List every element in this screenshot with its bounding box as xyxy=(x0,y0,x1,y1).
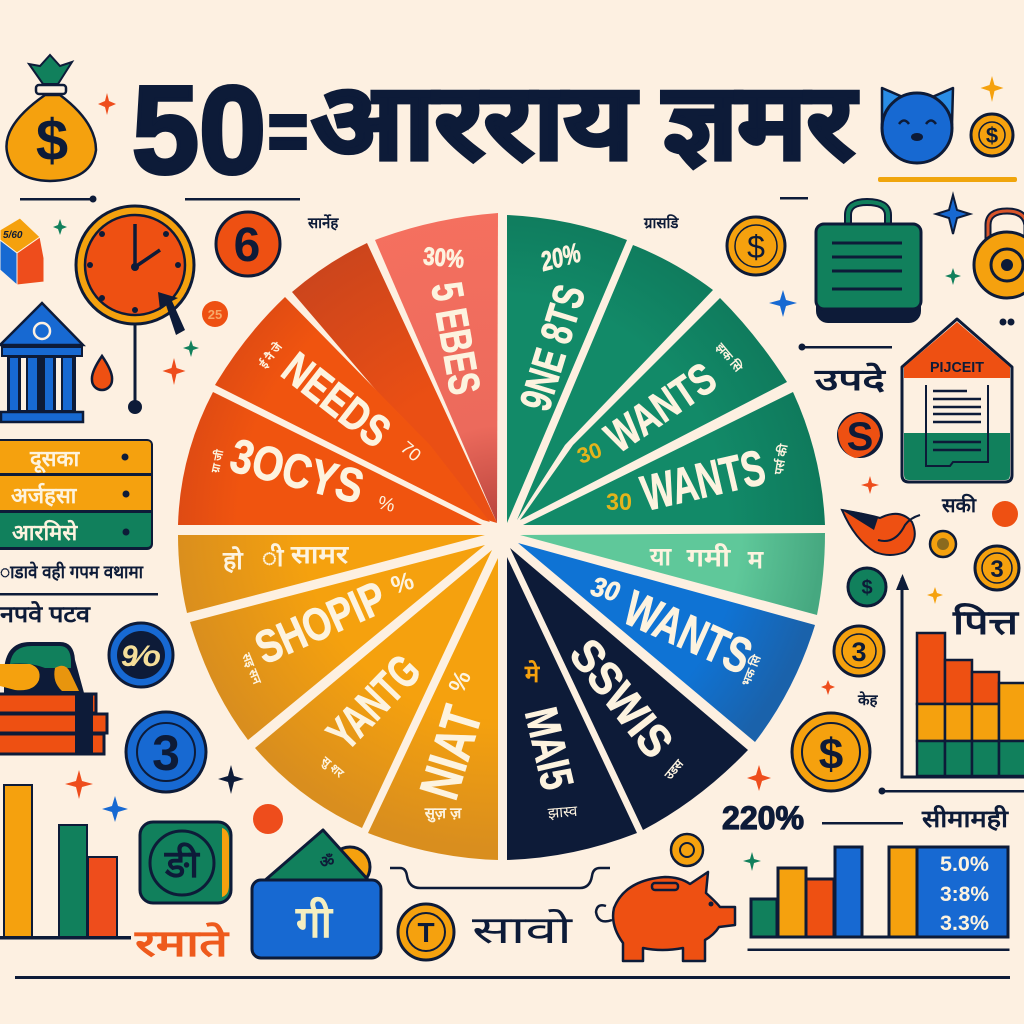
segment: light green: गमी xyxy=(686,543,732,572)
icon: small coin above pig xyxy=(671,834,703,866)
panel: percentages: 3:8% xyxy=(940,883,989,906)
icon: coin top right: $ xyxy=(986,123,998,148)
bar chart right xyxy=(896,574,1024,777)
icon: coins right cluster: 3 xyxy=(851,637,867,667)
segment: NEEDS xyxy=(215,297,490,522)
label bars left: आरमिसे xyxy=(12,519,78,545)
text: bottom word: सावो xyxy=(472,908,574,952)
icon: briefcase xyxy=(816,202,921,323)
icon: document house xyxy=(902,319,1012,482)
divider top left xyxy=(20,196,300,202)
segment: green WANTS 2 xyxy=(523,392,825,525)
icon: sparkles left xyxy=(53,219,199,385)
heading left: नपवे पटव xyxy=(0,600,91,627)
icon: percent circle: 9⁄o xyxy=(121,640,161,673)
panel: percentages: 5.0% xyxy=(940,853,989,876)
icon: wallet xyxy=(252,830,381,958)
text: small headings above wheel xyxy=(307,214,679,232)
text: orange word: रमाते xyxy=(134,922,231,964)
icon: green seal xyxy=(140,822,231,903)
title xyxy=(132,62,858,200)
segment: MAI5: मे xyxy=(524,660,541,688)
icon: coin: $ xyxy=(747,229,765,265)
bracket xyxy=(390,868,610,888)
segment: MAI5: झास्व xyxy=(547,803,579,822)
segment: NIAT: सुज़ ज़ xyxy=(424,805,462,823)
segment: NIAT: % xyxy=(443,666,477,697)
bar chart lower right xyxy=(748,847,1009,950)
title: आरराय xyxy=(312,65,638,181)
segment: 3OCYS xyxy=(178,392,482,525)
caption left: ाडावे वही गपम वथामा xyxy=(0,561,144,582)
icon: drop xyxy=(92,356,112,390)
icon: coins right cluster: 3 xyxy=(990,556,1004,583)
segment: 3OCYS: ग्रा जी xyxy=(208,447,227,475)
segment: SSWIS xyxy=(510,548,748,830)
icon: S mark xyxy=(837,412,883,459)
divider top right xyxy=(780,177,1017,200)
segment: SHOPIP: SHOPIP xyxy=(247,571,394,674)
segment: blue WANTS: भक सि xyxy=(739,652,764,688)
segment: light green: म xyxy=(747,546,764,574)
segment: yellow: ी xyxy=(262,543,285,572)
icon: number 6 circle: 6 xyxy=(234,219,260,272)
segment: NEEDS: 70 xyxy=(397,437,425,466)
segment: green WANTS 2: पर्स की xyxy=(771,442,791,477)
segment: light green xyxy=(520,533,825,615)
icon: coins right cluster: $ xyxy=(861,577,873,599)
segment: SSWIS: SSWIS xyxy=(560,629,684,767)
icon: coin xyxy=(727,217,785,275)
segment: salmon 30% xyxy=(375,213,498,523)
divider below chart xyxy=(878,788,1024,794)
icon: money bag xyxy=(6,55,96,181)
title: ज्ञमर xyxy=(662,65,858,181)
segment: yellow: सामर xyxy=(290,541,350,569)
segment: dark red xyxy=(292,243,497,523)
text: small label right xyxy=(821,680,879,709)
segment: 3OCYS: 3OCYS xyxy=(225,429,369,515)
segment: salmon 30%: 30% xyxy=(422,242,465,274)
icon: coin top right xyxy=(971,114,1013,156)
title: 50 xyxy=(132,62,266,200)
segment: NEEDS: ई नै जे xyxy=(256,339,286,372)
segment: MAI5 xyxy=(507,557,637,860)
segment: blue WANTS: WANTS xyxy=(616,580,760,685)
icon: document house: PIJCEIT xyxy=(930,359,984,376)
icon: money bag: $ xyxy=(36,108,68,173)
icon: sparkle orange top right xyxy=(980,76,1004,102)
segment: green WANTS 1 xyxy=(520,298,787,520)
icon: small red coin xyxy=(253,804,283,834)
icon: sparkles right xyxy=(769,195,1014,326)
segment: green WANTS 2: 30 xyxy=(606,489,632,516)
segment: SHOPIP: % xyxy=(388,567,417,600)
segment: NIAT: NIAT xyxy=(408,699,494,806)
segment: YANTG xyxy=(255,550,492,828)
icon: coins right cluster xyxy=(834,476,1019,676)
icon: number 3 coin blue xyxy=(126,712,206,792)
segment: blue WANTS xyxy=(518,543,815,742)
segment: green WANTS 2: WANTS xyxy=(636,439,770,522)
icon: small coin 25 xyxy=(202,301,228,327)
segment: light green: या xyxy=(649,543,673,571)
icon: S mark: S xyxy=(847,415,873,459)
text: small headings above wheel: ग्रासडि xyxy=(643,214,679,232)
segment: NEEDS: NEEDS xyxy=(273,342,400,457)
icon: bank xyxy=(0,303,83,422)
icon: box: 5/60 xyxy=(3,230,23,241)
text: 220%: 220% xyxy=(722,800,804,836)
icon: piggy bank xyxy=(596,872,735,961)
segment: blue WANTS: 30 xyxy=(588,571,623,607)
segment: salmon 30%: 5 EBES xyxy=(421,279,489,398)
text: small label right: केह xyxy=(857,691,879,709)
segment: SSWIS: उडस xyxy=(661,756,687,783)
icon: lamp leaf xyxy=(842,510,920,555)
text: right label xyxy=(798,344,892,397)
icon: wallet: ॐ xyxy=(320,853,335,871)
segment: NIAT xyxy=(368,558,498,860)
icon: clock xyxy=(76,206,194,414)
icon: box xyxy=(0,218,44,285)
icon: T coin xyxy=(398,904,454,960)
text: right lower heading: सीमामही xyxy=(921,805,1009,833)
bottom rule xyxy=(15,976,1010,979)
pie chart xyxy=(178,213,825,860)
segment: green xyxy=(517,245,713,520)
segment: green 20%: 20% xyxy=(537,238,584,277)
segment: yellow: हो xyxy=(222,546,244,575)
panel: percentages xyxy=(917,847,1008,937)
segment: green WANTS 1: WANTS xyxy=(597,354,725,462)
icon: stacked books xyxy=(0,643,107,754)
icon: T coin: T xyxy=(417,917,435,948)
icon: wallet: गी xyxy=(295,896,334,947)
icon: big coin: $ xyxy=(819,730,843,779)
segment: YANTG: YANTG xyxy=(317,644,430,760)
text: right label: उपदे xyxy=(814,362,886,397)
icon: blue cat face xyxy=(882,88,953,163)
bar chart lower left xyxy=(0,785,130,938)
segment: SHOPIP xyxy=(190,545,485,740)
icon: big coin xyxy=(792,713,870,791)
label bars left: अर्जहसा xyxy=(11,482,78,508)
icon: sparkles lower left xyxy=(65,765,244,822)
text: right small: सकी xyxy=(941,493,977,517)
title: = xyxy=(268,84,308,178)
segment: SHOPIP: सइ सन xyxy=(239,650,265,687)
icon: number 6 circle xyxy=(216,212,280,276)
icon: small coin 25: 25 xyxy=(208,307,222,322)
icon: percent circle xyxy=(109,623,173,687)
label bars left xyxy=(0,439,153,550)
icon: sparkles lower right xyxy=(743,587,943,871)
segment: YANTG: सु शर xyxy=(317,753,347,782)
segment: green 20% xyxy=(507,215,627,523)
icon: green seal: ङी xyxy=(164,842,200,886)
icon: sparkle red top left xyxy=(98,93,116,115)
segment: green WANTS 1: 30 xyxy=(574,437,605,469)
segment: yellow xyxy=(178,535,485,613)
text: chart title right: पित्त xyxy=(952,602,1020,642)
text: small headings above wheel: सार्नेह xyxy=(307,214,339,232)
segment: green 20%: 9NE 8TS xyxy=(511,279,595,416)
icon: padlock xyxy=(974,211,1024,298)
segment: MAI5: MAI5 xyxy=(515,703,584,794)
panel: percentages: 3.3% xyxy=(940,912,989,935)
label bars left: दूसका xyxy=(29,446,80,474)
segment: 3OCYS: % xyxy=(376,492,397,517)
segment: green WANTS 1: झक सि xyxy=(713,340,746,375)
icon: number 3 coin blue: 3 xyxy=(152,725,180,781)
